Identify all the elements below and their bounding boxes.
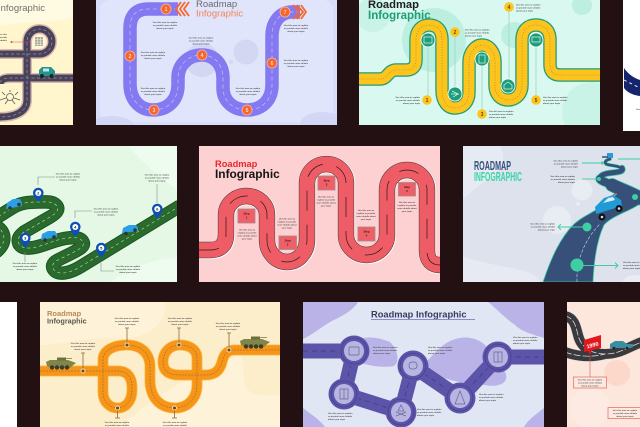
text blocks — [237, 196, 417, 240]
text box 1: about your topic — [581, 384, 599, 388]
text blocks: Use this area to explain — [94, 208, 119, 210]
numbered yellow markers — [422, 2, 541, 119]
text blocks: about your topic — [97, 214, 115, 216]
heading: ROADMAP INFOGRAPHIC: ROADMAP — [474, 159, 511, 173]
road: green winding road — [0, 202, 180, 273]
text blocks: your topic — [361, 218, 372, 221]
text blocks: Use this area to explain — [153, 21, 178, 24]
text blocks: Use this area to explain — [189, 36, 214, 40]
text blocks: Use this area to explain — [284, 24, 309, 27]
text blocks: about your topic — [287, 30, 305, 33]
connector lines — [428, 7, 536, 114]
text blocks: your topic — [282, 226, 293, 230]
text blocks: Use this area to explain — [428, 346, 453, 349]
text blocks: about your topic — [148, 180, 166, 182]
text blocks: about your topic — [119, 271, 137, 274]
text blocks: explain to provide — [238, 232, 257, 234]
callout connector — [10, 41, 31, 43]
step labels: Step — [363, 230, 370, 234]
text blocks: or provide more details — [554, 162, 579, 166]
icon: blue car — [595, 193, 622, 220]
pin numbers: 6 — [156, 206, 159, 212]
text blocks: or provide more details — [116, 268, 141, 271]
step labels — [243, 178, 410, 246]
text blocks: Use this area to explain — [168, 317, 193, 320]
text blocks: about your topic — [513, 342, 531, 345]
text blocks: your topic — [321, 204, 332, 208]
panel: orange roadmap slide, bottom left — [40, 302, 280, 427]
text blocks: Use this area to explain — [513, 336, 538, 339]
arrows — [558, 159, 640, 268]
text blocks: or provide more details — [417, 411, 442, 414]
marker numbers — [426, 5, 538, 118]
road: dark timeline road — [565, 316, 640, 356]
heading: Roadmap Infographic: Infographic — [215, 167, 280, 181]
text blocks: about your topic — [171, 323, 189, 326]
road: dark looping road — [0, 29, 73, 117]
marker numbers: 5 — [535, 98, 538, 104]
flag with year 1990: 1990 — [586, 341, 599, 350]
text blocks: Use this area to explain — [284, 59, 309, 62]
text blocks: about your topic — [543, 102, 561, 105]
text blocks: or provide more details — [531, 226, 556, 228]
text blocks: explain to provide — [317, 198, 336, 202]
step numbers: 2 — [129, 54, 132, 60]
road: purple angular road — [303, 351, 544, 412]
text blocks: about your topic — [558, 181, 576, 184]
text blocks: or provide more details — [373, 349, 398, 352]
icon: teal car — [610, 341, 633, 349]
text blocks: or provide more details — [489, 113, 514, 116]
road: red winding road — [199, 164, 440, 265]
panel: green roadmap slide, middle left — [0, 146, 180, 282]
text blocks: or provide more details — [163, 424, 188, 427]
heading: Roadmap Infographic — [196, 0, 243, 20]
connector line — [589, 355, 591, 377]
text blocks: about your topic — [239, 93, 257, 96]
marker numbers: 4 — [508, 5, 511, 11]
text blocks: or provide more details — [141, 90, 166, 93]
text blocks: more details about — [277, 224, 297, 226]
text blocks: about your topic — [373, 352, 391, 355]
text blocks: Use this area to explain — [531, 222, 556, 226]
text blocks: about your topic — [538, 228, 556, 232]
panel: white slide, bottom left — [0, 302, 17, 427]
text blocks: Use this area to explain — [465, 28, 490, 32]
text blocks: about your topic — [561, 166, 579, 168]
icon: start chevrons — [176, 2, 189, 16]
heading: Roadmap Infographic — [215, 159, 280, 181]
text blocks: or provide more details — [71, 345, 96, 348]
text blocks: about your topic — [156, 27, 174, 30]
step labels: 1 — [246, 216, 248, 220]
text blocks: about your topic — [74, 348, 92, 351]
text block: details — [0, 39, 8, 42]
icon: end chevrons — [293, 5, 306, 19]
step boxes — [238, 176, 416, 250]
icon: blue car 1 — [6, 199, 22, 210]
text blocks: your topic — [402, 210, 413, 213]
heading: Roadmap Infographic: Infographic — [47, 316, 87, 326]
panel: lavender roadmap slide, top centre — [96, 0, 337, 125]
text blocks: Use this area to explain — [328, 412, 353, 415]
text blocks: or provide more details — [428, 349, 453, 352]
pin numbers — [24, 190, 159, 250]
text blocks: Use this area to explain — [13, 262, 38, 265]
road: perspective road — [543, 159, 640, 282]
panel: pink roadmap slide, middle centre — [199, 146, 440, 282]
text blocks: or provide more details — [216, 325, 241, 328]
text blocks: Use this area to explain — [554, 160, 579, 162]
heading: Roadmap Infographic: Roadmap — [215, 159, 258, 169]
icon: distant car — [602, 153, 613, 158]
step numbers: 6 — [271, 61, 274, 67]
icon: tank left — [46, 358, 76, 370]
step labels: Step — [285, 238, 291, 242]
pin centres — [22, 190, 160, 251]
pin numbers: 2 — [37, 190, 40, 196]
step labels: 2 — [287, 242, 289, 246]
road: orange road with loops — [40, 345, 280, 408]
panel: mint roadmap slide, top right — [359, 0, 600, 125]
waypoint circles — [570, 162, 638, 272]
step numbers: 5 — [246, 108, 249, 114]
text blocks: or provide more details — [145, 176, 170, 180]
text blocks: Use this area to explain — [105, 421, 130, 424]
text blocks: or provide more details — [189, 40, 214, 42]
icon: grid badge — [32, 36, 46, 48]
heading: ROADMAP INFOGRAPHIC — [474, 159, 522, 184]
road: navy road — [624, 68, 640, 96]
icon glyphs — [424, 37, 540, 97]
text blocks: about your topic — [192, 42, 210, 46]
panel: yellow roadmap slide, top left — [0, 0, 73, 125]
text blocks: or provide more details — [543, 99, 568, 102]
text blocks: or provide more details — [56, 176, 81, 178]
text blocks: Use this area to explain — [163, 421, 188, 424]
text blocks: Use this area to — [279, 218, 296, 220]
panel: white slide with navy road, far right — [623, 0, 640, 131]
text blocks: Use this area to explain — [373, 346, 398, 349]
text blocks: about your topic — [403, 102, 421, 105]
step labels: Step — [243, 212, 250, 216]
icon: blue car 3 — [122, 225, 138, 235]
text blocks: or provide more details — [284, 27, 309, 30]
text blocks: more details about — [316, 202, 336, 204]
text blocks: Use this area to explain — [551, 175, 576, 178]
text blocks: or provide more details — [236, 90, 261, 93]
pin numbers: 3 — [24, 236, 27, 240]
text blocks: about your topic — [516, 10, 534, 12]
icon: spark emblem — [0, 90, 20, 104]
heading: Roadmap Infographic: Roadmap — [47, 309, 82, 318]
road dashes — [624, 80, 638, 88]
step numbers: 3 — [153, 108, 156, 114]
icon badges — [421, 33, 543, 101]
connector lines — [25, 177, 157, 271]
text blocks: explain to provide — [357, 212, 376, 215]
map pins — [20, 188, 163, 258]
text blocks: or provide more details — [396, 99, 421, 102]
heading: Roadmap Infographic — [368, 0, 431, 22]
text blocks: or provide more details — [105, 424, 130, 427]
text blocks: or provide more details — [13, 265, 38, 268]
text blocks: Use this area to explain — [141, 87, 166, 90]
text blocks: explain to provide — [278, 220, 297, 224]
road: purple winding road — [130, 9, 300, 110]
heading: Roadmap Infographic: Infographic — [368, 10, 431, 22]
text blocks: more details about — [397, 207, 417, 210]
text blocks: about your topic — [219, 328, 237, 331]
pin numbers: 4 — [74, 224, 77, 230]
text blocks — [531, 160, 640, 270]
text block: Use — [636, 109, 640, 111]
text blocks: about your topic — [623, 267, 640, 270]
text blocks — [13, 172, 170, 274]
text blocks: about your topic — [489, 116, 507, 119]
pin numbers: 5 — [100, 246, 103, 250]
text blocks: Use this area to explain — [115, 317, 140, 320]
text blocks: Use this area to explain — [479, 393, 504, 396]
road: yellow winding road — [359, 25, 600, 108]
step numbers — [129, 7, 287, 114]
text blocks: Use this area to explain — [56, 172, 81, 176]
step labels: Step — [323, 178, 330, 182]
text blocks: or provide more details — [513, 339, 538, 342]
step labels: Step — [404, 185, 410, 189]
heading: ROADMAP INFOGRAPHIC: INFOGRAPHIC — [474, 170, 522, 184]
text blocks: about your topic — [465, 34, 483, 38]
text blocks: Use this area to explain — [145, 174, 170, 176]
step labels: 4 — [366, 234, 368, 238]
text blocks: or provide more details — [465, 32, 490, 34]
text box 1 — [574, 377, 606, 388]
text blocks: Use this area to — [318, 196, 335, 198]
text box 2: about your topic — [616, 415, 634, 418]
text blocks: or provide more details — [328, 415, 353, 418]
text blocks — [396, 4, 568, 119]
panel: grey-blue roadmap slide, middle right — [463, 146, 640, 289]
icon: blue car 2 — [41, 231, 57, 242]
text blocks: about your topic — [287, 65, 305, 68]
text blocks: or provide more details — [153, 24, 178, 27]
step labels: 5 — [406, 189, 408, 193]
text blocks: Use this area to explain — [489, 110, 514, 113]
text blocks: about your topic — [144, 93, 162, 96]
text blocks: Use this area to explain — [216, 322, 241, 325]
text blocks: Use this area to — [358, 209, 375, 212]
text blocks: or provide more details — [479, 396, 504, 399]
text blocks: explain to provide — [398, 204, 417, 207]
text blocks: Use this area to explain — [516, 4, 541, 6]
text box 1: Use this area to explain — [578, 378, 603, 382]
text blocks: more details about — [356, 215, 376, 218]
text blocks: Use this area to explain — [543, 96, 568, 99]
text blocks: Use this area to explain — [396, 96, 421, 99]
text blocks: more details about — [237, 234, 257, 238]
text blocks: or provide more details — [284, 62, 309, 65]
text blocks: Use this area to explain — [417, 408, 442, 411]
step markers 1 to 7 — [125, 4, 290, 115]
panel: peach timeline slide, bottom right — [565, 302, 640, 427]
text blocks: about your topic — [479, 399, 497, 402]
text blocks — [71, 317, 241, 427]
waypoint dots — [81, 343, 231, 410]
text blocks: about your topic — [417, 414, 435, 417]
text blocks: or provide more details — [94, 210, 119, 214]
text blocks: Use this area to — [239, 228, 256, 232]
text blocks: Use this area to explain — [71, 342, 96, 345]
text box 2 — [608, 408, 640, 418]
text box 2: Use this area to explain — [613, 409, 638, 412]
text blocks: or provide more details — [141, 54, 166, 57]
text blocks: or provide more details — [551, 178, 576, 181]
text blocks: about your topic — [59, 178, 77, 182]
text blocks — [141, 21, 309, 96]
text blocks: Use this area to — [399, 201, 416, 204]
icon: tank right — [240, 336, 270, 349]
stems — [81, 328, 231, 418]
heading: Roadmap Infographic: Infographic — [196, 8, 243, 20]
text box 1: or provide more details — [578, 382, 603, 384]
heading: Roadmap Infographic — [47, 309, 87, 326]
text blocks: about your topic — [328, 418, 346, 421]
step numbers: 1 — [165, 7, 168, 13]
icon: teal car — [39, 67, 55, 78]
text blocks: Use this area to explain — [141, 51, 166, 54]
road nodes with icons — [328, 336, 514, 427]
text blocks: your topic — [242, 238, 253, 240]
marker numbers: 2 — [454, 30, 457, 36]
heading: Roadmap Infographic: Roadmap Infographic — [371, 309, 467, 319]
marker numbers: 1 — [426, 98, 429, 104]
text blocks: Use this area to explain — [116, 265, 141, 268]
step labels: 3 — [326, 182, 328, 186]
text blocks: about your topic — [428, 352, 446, 355]
text blocks — [328, 336, 538, 421]
step numbers: 4 — [201, 53, 204, 59]
step numbers: 7 — [284, 10, 287, 16]
text blocks: or provide more details — [168, 320, 193, 323]
text box 2: or provide more details — [613, 412, 638, 415]
text blocks: or provide more details — [516, 6, 541, 10]
text blocks: Use this area to explain — [236, 87, 261, 90]
text blocks: about your topic — [144, 57, 162, 60]
text blocks: about your topic — [16, 268, 34, 271]
text blocks: about your topic — [118, 323, 136, 326]
marker numbers: 3 — [481, 112, 484, 118]
panel: periwinkle roadmap slide, bottom centre — [303, 302, 544, 427]
text blocks: or provide more details — [115, 320, 140, 323]
heading underline — [371, 318, 475, 321]
